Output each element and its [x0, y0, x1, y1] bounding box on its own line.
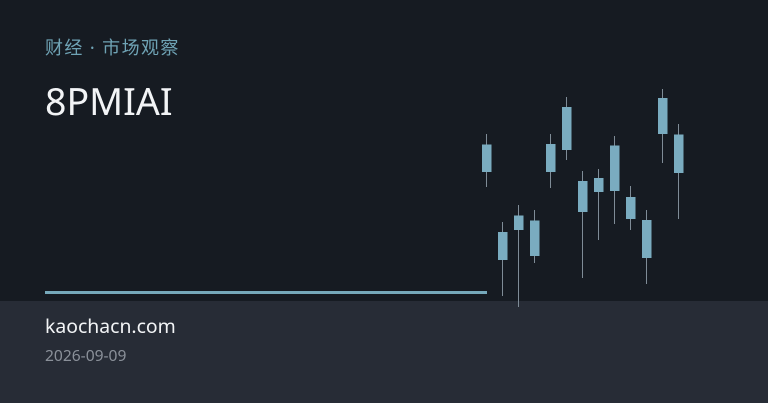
footer band	[0, 301, 768, 403]
title: 8PMIAI	[45, 75, 173, 126]
eyebrow heading: 财经 · 市场观察	[45, 36, 180, 60]
accent line	[45, 291, 487, 294]
site name: kaochacn.com	[45, 312, 176, 339]
date: 2026-09-09	[45, 344, 126, 366]
